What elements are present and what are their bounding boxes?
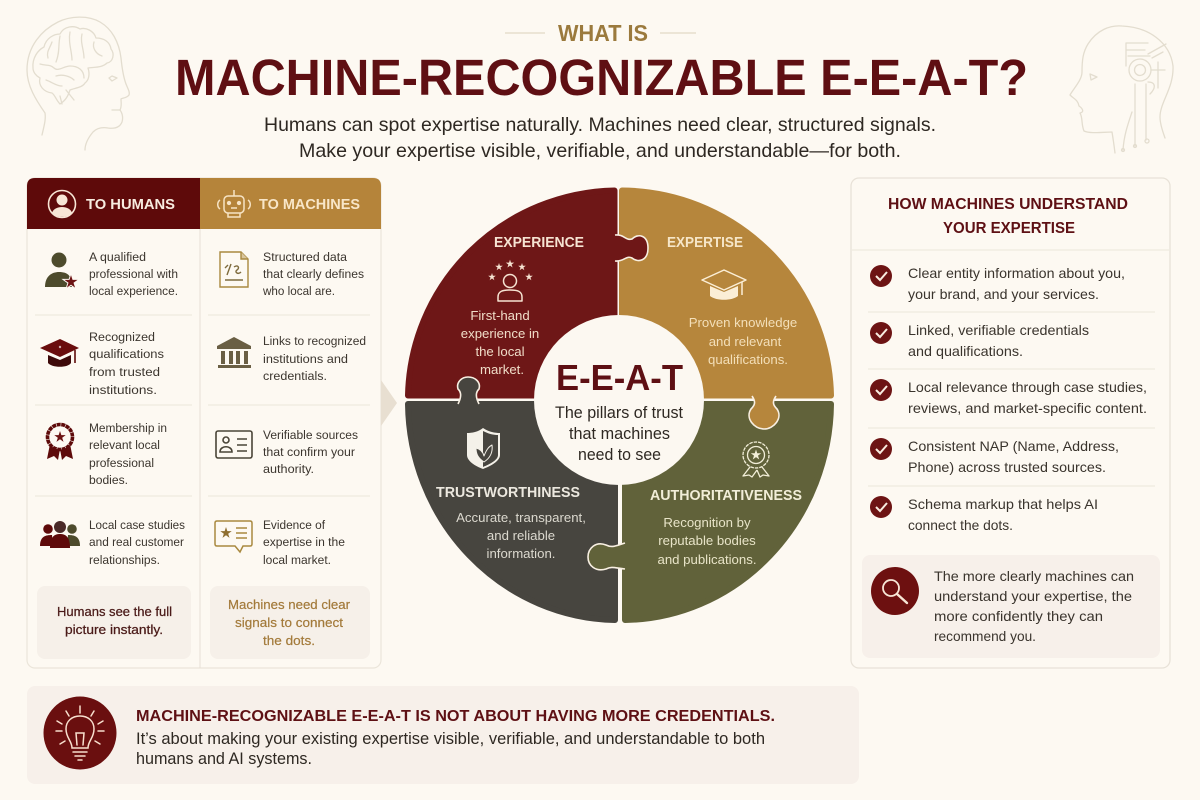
panel heading (888, 196, 1128, 237)
center description: The pillars of trust (555, 403, 683, 422)
subtitle (264, 114, 936, 162)
callout: machines recommend: more confidently they can (934, 608, 1103, 624)
eyebrow heading: WHAT IS (558, 20, 648, 46)
text: authoritativeness: Recognition by (663, 515, 751, 530)
text: expertise: Proven knowledge (689, 315, 797, 330)
text: evidence of expertise: expertise in the (263, 535, 345, 549)
quadrant: trustworthiness (408, 404, 615, 620)
quadrant: expertise (622, 190, 831, 396)
panel heading: HOW MACHINES UNDERSTAND (888, 196, 1128, 213)
callout: machines: the dots. (263, 633, 315, 648)
icon: magnifier (871, 567, 919, 615)
puzzle tab: expertise (749, 396, 779, 429)
callout: machines (210, 586, 370, 659)
text: authoritativeness: reputable bodies (658, 533, 756, 548)
icon: rosette (47, 424, 73, 460)
text: expertise (667, 235, 797, 367)
header: to machines: TO MACHINES (259, 197, 360, 213)
text: qualified professional (89, 250, 178, 298)
text: expertise: qualifications. (708, 352, 788, 367)
banner: key takeaway (27, 686, 859, 784)
text: authoritativeness (650, 488, 802, 567)
icon: ID card (216, 431, 252, 458)
text: trustworthiness: information. (487, 546, 555, 561)
text: qualified professional: A qualified (89, 250, 146, 264)
icon: robotic head with circuits (1070, 26, 1173, 153)
text: experience: EXPERIENCE (494, 235, 584, 251)
text: verifiable sources (263, 428, 358, 476)
text: recognized qualifications: Recognized (89, 330, 155, 344)
header: to humans (27, 178, 200, 229)
text: evidence of expertise: Evidence of (263, 518, 326, 532)
list item: credentials: and qualifications. (908, 343, 1023, 359)
list item: schema markup: connect the dots. (908, 517, 1013, 533)
puzzle tab: trustworthiness (458, 377, 479, 404)
title: MACHINE-RECOGNIZABLE E-E-A-T? (175, 49, 1028, 106)
text: structured data: who local are. (262, 284, 335, 298)
callout: machines: signals to connect (235, 615, 343, 630)
callout: machines recommend: recommend you. (934, 628, 1036, 644)
text: recognized qualifications: from trusted (89, 365, 160, 379)
icon: institution building (217, 337, 251, 368)
text: authoritativeness: AUTHORITATIVENESS (650, 488, 802, 504)
text: structured data: Structured data (263, 250, 347, 264)
list item: local relevance: Local relevance through case studies, (908, 379, 1147, 395)
center title: E-E-A-T (556, 357, 683, 398)
icon: award ribbon (743, 442, 769, 477)
takeaway heading: MACHINE-RECOGNIZABLE E-E-A-T IS NOT ABOUT HAVING MORE CREDENTIALS. (136, 708, 775, 725)
center badge (534, 315, 704, 485)
list item: consistent NAP (870, 438, 1119, 475)
subtitle: Make your expertise visible, verifiable, and understandable—for both. (299, 140, 901, 162)
text: experience (461, 235, 584, 377)
icon: structured data document (220, 252, 248, 287)
icon: mortarboard (702, 270, 746, 300)
quadrant: authoritativeness (625, 404, 831, 620)
text: membership: professional (89, 456, 154, 470)
center description (555, 403, 683, 464)
list item: local relevance (870, 379, 1147, 416)
puzzle tab: authoritativeness (588, 543, 625, 570)
header: to humans: TO HUMANS (86, 197, 175, 213)
list item: schema markup (870, 496, 1098, 533)
text: qualified professional: professional with (89, 267, 178, 281)
text: expertise: EXPERTISE (667, 235, 743, 251)
text: local case studies: and real customer (89, 535, 184, 549)
list item: entity information (870, 265, 1125, 302)
list item: entity information: your brand, and your services. (908, 286, 1099, 302)
icon: review speech bubble (215, 521, 252, 552)
panel: to humans vs to machines (27, 178, 381, 668)
puzzle tab: experience (615, 235, 648, 261)
text: membership (89, 421, 167, 487)
text: local case studies: Local case studies (89, 518, 185, 532)
text: structured data (262, 250, 364, 298)
text: experience: the local (475, 344, 525, 359)
text: recognized qualifications: institutions. (89, 383, 157, 397)
text: authoritativeness: and publications. (658, 552, 756, 567)
text: local case studies (89, 518, 185, 567)
takeaway body: It’s about making your existing expertise visible, verifiable, and understandable to both (136, 730, 765, 748)
callout: humans (37, 586, 191, 659)
icon: shield with leaf (467, 428, 500, 469)
list item: credentials: Linked, verifiable credentials (908, 322, 1089, 338)
callout: humans: Humans see the full (57, 604, 172, 619)
icon: human head with brain (27, 17, 129, 150)
text: verifiable sources: that confirm your (263, 445, 355, 459)
callout: machines: Machines need clear (228, 597, 351, 612)
callout: humans: picture instantly. (65, 622, 163, 637)
list item: entity information: Clear entity information about you, (908, 265, 1125, 281)
list item: schema markup: Schema markup that helps AI (908, 496, 1098, 512)
list item: credentials (870, 322, 1089, 359)
text: links to institutions: Links to recognized (263, 334, 366, 348)
text: expertise: and relevant (709, 334, 782, 349)
arrow: from panel to wheel (381, 380, 397, 426)
text: trustworthiness: TRUSTWORTHINESS (436, 485, 580, 501)
icon: person with stars (488, 260, 533, 301)
text: links to institutions (263, 334, 366, 383)
header: to machines (200, 178, 381, 229)
panel heading: YOUR EXPERTISE (943, 220, 1075, 237)
quadrant: experience (408, 190, 614, 396)
text: local case studies: relationships. (89, 553, 160, 567)
text: qualified professional: local experience. (89, 284, 178, 298)
center description: need to see (578, 445, 661, 464)
callout: machines recommend: The more clearly machines can (934, 568, 1134, 584)
list item: local relevance: reviews, and market-specific content. (908, 400, 1147, 416)
icon: graduation cap (40, 339, 79, 367)
text: membership: bodies. (89, 473, 128, 487)
text: links to institutions: credentials. (263, 369, 327, 383)
text: trustworthiness: and reliable (487, 528, 555, 543)
text: evidence of expertise: local market. (263, 553, 331, 567)
takeaway body: humans and AI systems. (136, 750, 312, 768)
text: structured data: that clearly defines (263, 267, 364, 281)
text: trustworthiness (436, 485, 586, 561)
center description: that machines (569, 424, 670, 443)
text: experience: market. (480, 362, 524, 377)
panel: how machines understand (851, 178, 1170, 668)
chart: E-E-A-T puzzle wheel (408, 190, 831, 620)
text: recognized qualifications (89, 330, 164, 397)
takeaway body (136, 730, 765, 768)
icon: group of people (40, 521, 80, 548)
list item: consistent NAP: Phone) across trusted sources. (908, 459, 1106, 475)
subtitle: Humans can spot expertise naturally. Machines need clear, structured signals. (264, 114, 936, 136)
text: membership: Membership in (89, 421, 167, 435)
list item: consistent NAP: Consistent NAP (Name, Address, (908, 438, 1119, 454)
text: verifiable sources: authority. (263, 462, 314, 476)
callout: machines recommend: understand your expertise, the (934, 588, 1132, 604)
text: links to institutions: institutions and (263, 352, 348, 366)
callout: machines recommend (862, 555, 1160, 658)
text: trustworthiness: Accurate, transparent, (456, 510, 586, 525)
icon: qualified professional (45, 252, 79, 289)
text: experience: experience in (461, 326, 539, 341)
text: experience: First-hand (470, 308, 530, 323)
text: evidence of expertise (263, 518, 345, 567)
text: recognized qualifications: qualifications (89, 347, 164, 361)
text: verifiable sources: Verifiable sources (263, 428, 358, 442)
icon: light bulb (44, 696, 116, 770)
text: membership: relevant local (89, 438, 160, 452)
